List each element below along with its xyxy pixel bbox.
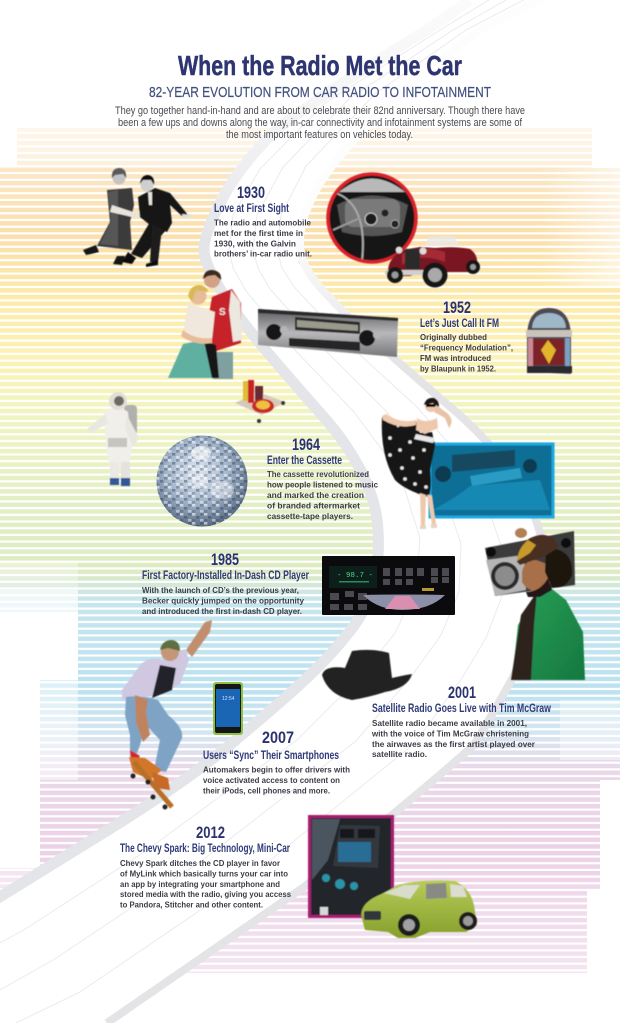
text block: 1930: The radio and automobile <box>214 218 311 228</box>
text block: 1964: The cassette revolutionized <box>267 469 369 479</box>
intro paragraph: They go together hand-in-hand and are about to celebrate their 82nd anniversary. Though there have <box>115 105 525 117</box>
text block: 2001: 2001 <box>448 683 476 702</box>
icon: woman in polka dot dress <box>382 398 452 529</box>
text block: 2012: Chevy Spark ditches the CD player in favor <box>120 858 281 868</box>
icon: CD player <box>322 556 455 615</box>
text block: 2012: The Chevy Spark: Big Technology, Mini-Car <box>120 843 290 855</box>
text block: 2007: Users “Sync” Their Smartphones <box>203 750 339 762</box>
subtitle: 82-YEAR EVOLUTION FROM CAR RADIO TO INFOTAINMENT <box>149 84 491 101</box>
text block: 2001: Satellite Radio Goes Live with Tim McGraw <box>372 703 551 715</box>
icon: car stereo 1952 <box>258 309 398 357</box>
icon: smartphone <box>213 682 243 735</box>
text block: 1952: 1952 <box>443 298 471 317</box>
text block: 2007: voice activated access to content on <box>203 775 340 785</box>
text block: 1964: Enter the Cassette <box>267 455 342 467</box>
text block: 2012: an app by integrating your smartphone and <box>120 879 280 889</box>
icon: green Chevy Spark <box>361 880 477 938</box>
text block: 1985 <box>142 550 309 616</box>
text block: 1985: With the launch of CD’s the previous year, <box>142 585 299 595</box>
text block: 1930: 1930, with the Galvin <box>214 238 296 248</box>
text block: 1930: 1930 <box>237 183 265 202</box>
intro paragraph: been a few ups and downs along the way, in-car connectivity and infotainment systems are some of <box>118 117 523 129</box>
text block: 1952: FM was introduced <box>420 353 491 363</box>
text block: 1964 <box>267 435 378 521</box>
text block: 1930: met for the first time in <box>214 228 303 238</box>
text block: 1930 <box>214 183 312 258</box>
panel: Spark dash photo <box>310 816 392 916</box>
icon: vintage dashboard in red circle <box>328 174 416 262</box>
text block: 2001: satellite radio. <box>372 749 427 759</box>
text block: 1964: cassette-tape players. <box>267 511 353 521</box>
icon: astronaut <box>87 392 139 486</box>
icon: smartphone: 12:54 <box>222 696 235 702</box>
text block: 1964: 1964 <box>292 435 320 454</box>
text block: 1952 <box>420 298 513 374</box>
icon: man with boombox <box>485 528 585 680</box>
icon: skateboarder <box>122 620 212 810</box>
text block: 1930: brothers’ in-car radio unit. <box>214 248 312 258</box>
intro paragraph: the most important features on vehicles today. <box>226 129 413 141</box>
text block: 2012: 2012 <box>196 823 225 842</box>
text block: 2007: their iPods, cell phones and more. <box>203 786 330 796</box>
icon: CD player: - 98.7 - <box>337 572 373 580</box>
text block: 1964: how people listened to music <box>267 480 378 490</box>
text block: 2001: Satellite radio became available in 2001, <box>372 718 527 728</box>
text block: 1930: Love at First Sight <box>214 203 289 215</box>
icon: 1950s couple: S <box>219 307 226 318</box>
text block: 2007 <box>203 728 350 796</box>
intro paragraph <box>115 105 525 141</box>
text block: 1985: and introduced the first in-dash CD player. <box>142 606 302 616</box>
text block: 2012: to Pandora, Stitcher and other content. <box>120 900 263 910</box>
text block: 1985: Becker quickly jumped on the opportunity <box>142 596 304 606</box>
text block: 2001 <box>371 683 551 759</box>
text block: 2001: the airwaves as the first artist played over <box>372 739 536 749</box>
text block: 1964: of branded aftermarket <box>267 500 360 510</box>
text block: 1985: First Factory-Installed In-Dash CD Player <box>142 570 309 582</box>
title: When the Radio Met the Car <box>178 50 462 81</box>
icon: jukebox <box>526 308 572 374</box>
text block: 2012 <box>120 823 291 910</box>
text block: 2007: 2007 <box>262 728 294 747</box>
icon: diner tray <box>235 380 285 423</box>
text block: 1952: Originally dubbed <box>420 332 487 342</box>
text block: 2007: Automakers begin to offer drivers with <box>203 764 350 774</box>
text block: 1952: by Blaupunk in 1952. <box>420 364 496 374</box>
icon: red vintage car <box>385 236 480 288</box>
icon: dancing couple <box>83 168 193 267</box>
text block: 1985: 1985 <box>211 550 239 569</box>
icon: cowboy hat <box>322 650 412 700</box>
text block: 2001: with the voice of Tim McGraw christening <box>371 728 529 738</box>
text block: 2012: of MyLink which basically turns your car into <box>120 868 288 878</box>
text block: 2012: stored media with the radio, giving you access <box>120 889 291 899</box>
text block: 1952: Let’s Just Call It FM <box>420 318 499 330</box>
panel: blue cassette dash photo <box>430 444 553 517</box>
icon: disco ball <box>156 436 248 526</box>
icon: 1950s couple <box>168 270 242 379</box>
text block: 1952: “Frequency Modulation”, <box>420 342 513 352</box>
text block: 1964: and marked the creation <box>267 490 364 500</box>
